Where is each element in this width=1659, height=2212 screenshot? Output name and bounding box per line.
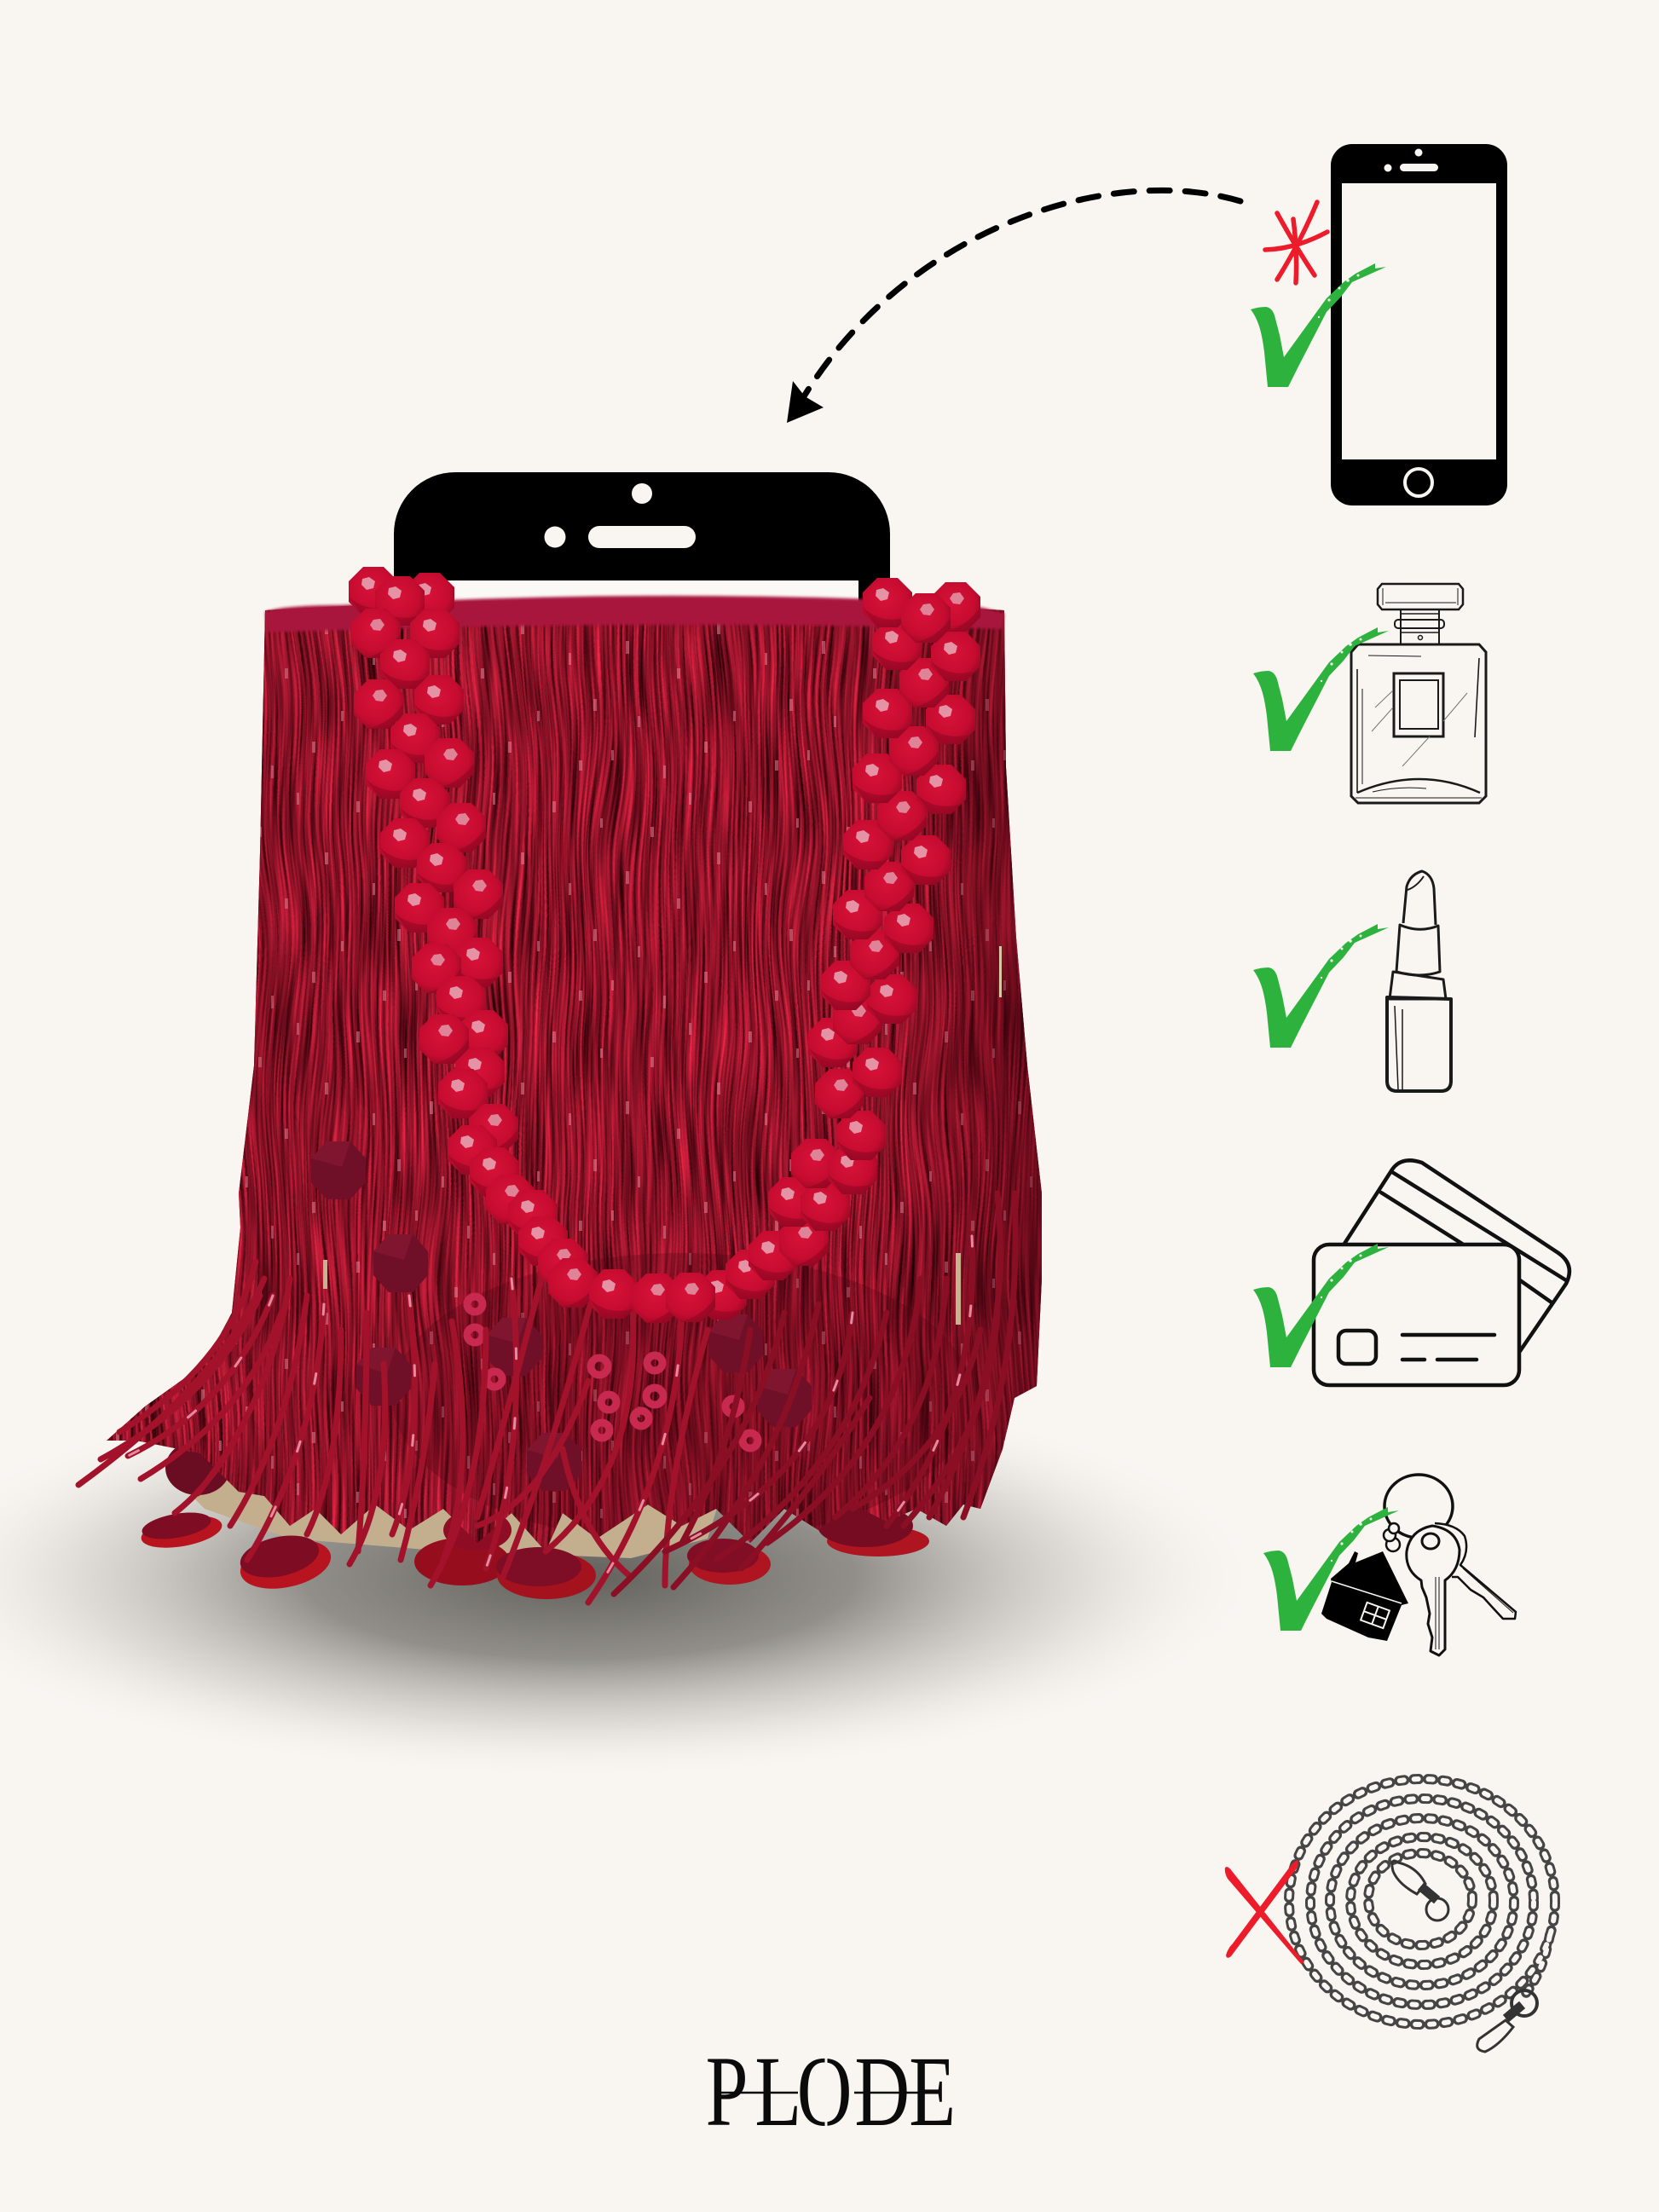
brand logo PLODE: PLODE [706,2036,956,2147]
beaded fringe bag [68,567,1057,1603]
velvet top rim [265,596,1004,632]
item: house keychain and keys [1321,1475,1516,1655]
chain links [1384,1523,1400,1551]
bag base and hanging crystals [139,1441,929,1599]
rear key [1435,1523,1516,1619]
item: bank cards [1314,1160,1569,1385]
fringe body texture [68,588,1057,1560]
dashed curved arrow [787,190,1240,423]
inner clasp [1392,1861,1448,1920]
house tag [1321,1551,1408,1641]
split ring [1422,1533,1439,1549]
large phone tucked into the bag [394,472,890,631]
key detail lines [1436,1568,1513,1649]
sequins [467,1297,758,1448]
red cross on chain [1225,1860,1304,1964]
front key [1407,1526,1460,1655]
green check: cards [1253,1244,1389,1367]
outer clasp [1477,1990,1537,2052]
green check: perfume [1253,627,1389,751]
crystal bead handle [349,567,980,1323]
item: coiled chain strap [1289,1779,1555,2052]
loose fringe strands [78,1193,1015,1603]
green check: phone [1251,263,1386,387]
red asterisk marker [1265,202,1327,283]
key ring [1384,1475,1453,1538]
green check: lipstick [1253,924,1389,1048]
item: lipstick [1387,871,1451,1091]
bag ground shadow [0,1372,1270,1782]
item: perfume bottle [1351,584,1486,803]
item: phone [1331,144,1507,505]
dark crystal drops [311,1141,812,1491]
green check: keys [1263,1507,1399,1631]
